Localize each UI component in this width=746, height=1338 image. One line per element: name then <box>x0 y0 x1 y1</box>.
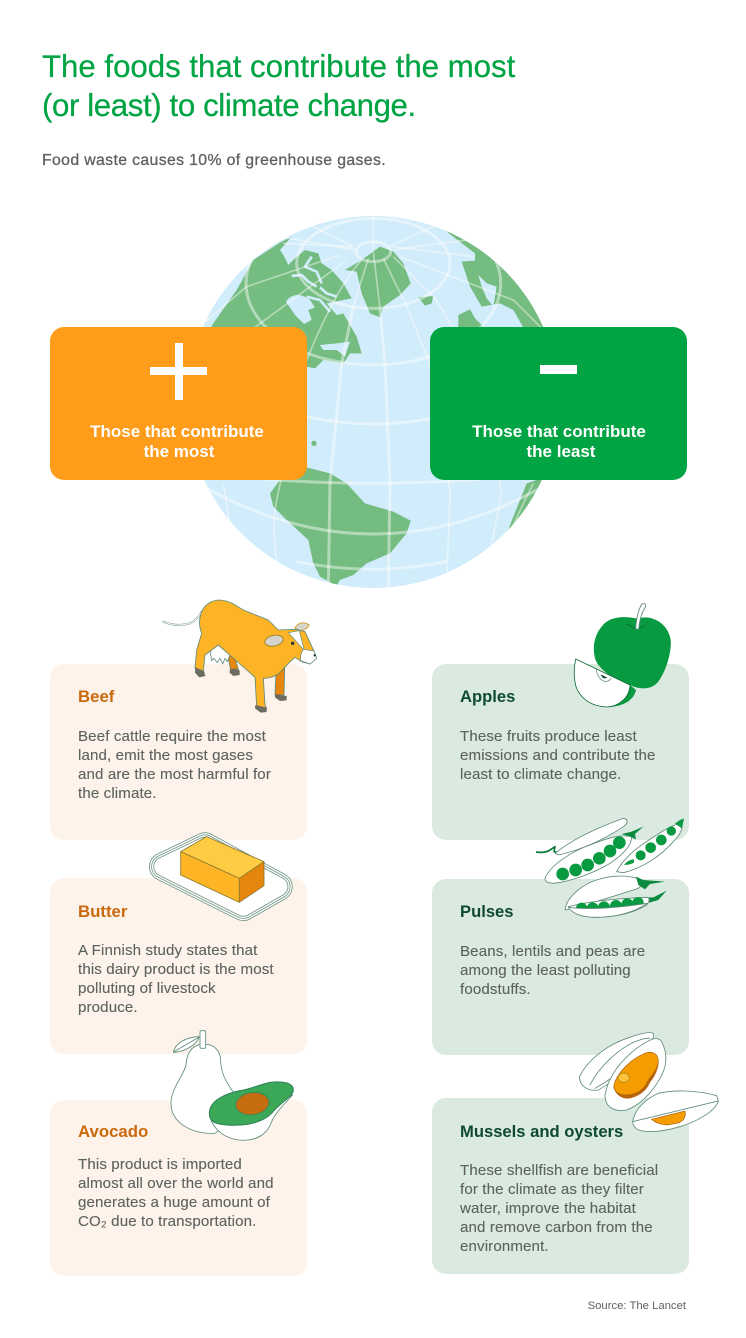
icon: cow <box>163 600 317 713</box>
panel: mussels and oysters: for the climate as they filter <box>460 1181 644 1198</box>
panel: apples: least to climate change. <box>460 766 621 783</box>
source: Source: The Lancet <box>588 1300 687 1312</box>
panel: beef <box>50 664 307 840</box>
panel: mussels and oysters: water, improve the habitat <box>459 1200 637 1217</box>
panel: beef: Beef <box>78 687 115 706</box>
title: (or least) to climate change. <box>42 88 416 123</box>
panel: butter: polluting of livestock <box>78 980 216 997</box>
panel: butter: A Finnish study states that <box>78 942 258 959</box>
panel: contribute the least: Those that contribute <box>472 422 646 441</box>
panel: butter: produce. <box>78 999 138 1016</box>
panel: beef: the climate. <box>78 785 157 802</box>
panel: contribute the most: Those that contribute <box>90 422 264 441</box>
panel: apples <box>432 664 689 840</box>
panel: beef: land, emit the most gases <box>78 747 253 764</box>
panel: mussels and oysters: and remove carbon from the <box>460 1219 653 1236</box>
panel: butter: this dairy product is the most <box>78 961 274 978</box>
panel: pulses: Beans, lentils and peas are <box>460 943 645 960</box>
panel: mussels and oysters <box>432 1098 689 1274</box>
panel: butter: Butter <box>78 902 128 921</box>
panel: pulses <box>432 879 689 1055</box>
icon: butter <box>163 837 278 907</box>
panel: avocado: generates a huge amount of <box>78 1194 271 1211</box>
panel: butter <box>50 878 307 1054</box>
icon: minus <box>540 365 577 374</box>
panel: apples: Apples <box>460 687 515 706</box>
panel: mussels and oysters: environment. <box>460 1238 549 1255</box>
heading: mussels and oysters: Mussels and oysters <box>460 1122 623 1141</box>
panel: pulses: foodstuffs. <box>460 981 531 998</box>
water cut-outs <box>286 275 497 357</box>
panel: avocado: CO₂ due to transportation. <box>78 1213 256 1230</box>
graticule <box>205 216 542 588</box>
panel: beef: and are the most harmful for <box>78 766 271 783</box>
icon: pulses <box>536 818 684 917</box>
icon: plus <box>150 343 207 400</box>
icon: mussels <box>579 1033 718 1132</box>
panel: avocado: This product is imported <box>78 1156 242 1173</box>
panel: contribute the most: the most <box>144 442 215 461</box>
title <box>42 49 516 123</box>
icon: avocado <box>171 1031 293 1140</box>
panel: apples: emissions and contribute the <box>460 747 656 764</box>
panel: contribute the least <box>430 327 687 480</box>
panel: pulses: Pulses <box>460 902 514 921</box>
panel: contribute the least: the least <box>527 442 596 461</box>
subtitle: Food waste causes 10% of greenhouse gases. <box>42 152 386 169</box>
panel: avocado <box>50 1100 307 1276</box>
panel: avocado: Avocado <box>78 1122 148 1141</box>
panel: contribute the most <box>50 327 307 480</box>
panel: pulses: among the least polluting <box>460 962 631 979</box>
icon: apple <box>574 604 671 707</box>
panel: mussels and oysters: These shellfish are beneficial <box>460 1162 658 1179</box>
title: The foods that contribute the most <box>42 49 516 84</box>
panel: apples: These fruits produce least <box>460 728 637 745</box>
globe illustration <box>203 216 544 588</box>
panel: avocado: almost all over the world and <box>78 1175 274 1192</box>
panel: beef: Beef cattle require the most <box>78 728 267 745</box>
